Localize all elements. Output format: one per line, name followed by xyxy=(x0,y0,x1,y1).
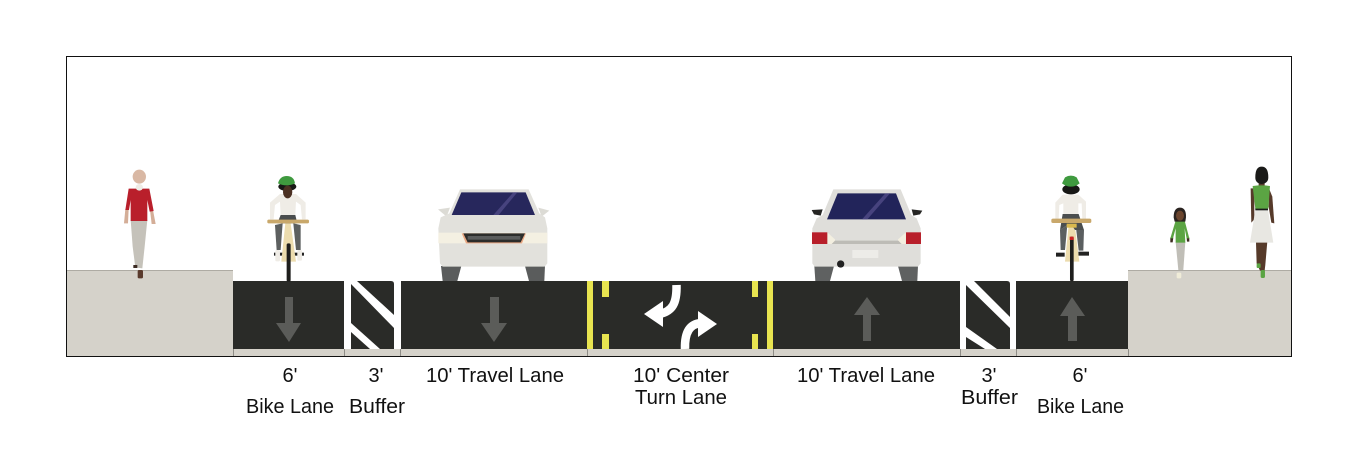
icon: up arrow xyxy=(1060,297,1085,341)
cyclist riding toward viewer xyxy=(267,176,309,282)
right bike lane xyxy=(1016,281,1128,349)
label: center turn lane: Turn Lane xyxy=(635,387,727,409)
label: center turn lane xyxy=(633,365,729,409)
label: left bike lane xyxy=(246,365,334,418)
pedestrian: child in green xyxy=(1170,208,1189,278)
label: right buffer: 3' xyxy=(982,365,996,387)
car front view xyxy=(438,189,549,281)
label: left bike lane: Bike Lane xyxy=(246,396,334,418)
left sidewalk xyxy=(67,270,233,356)
icon: down arrow xyxy=(276,297,301,342)
label: left bike lane: 6' xyxy=(283,365,297,387)
label: right travel lane: 10' Travel Lane xyxy=(797,365,935,387)
right travel lane xyxy=(773,281,960,349)
frame border xyxy=(66,56,1292,356)
right buffer xyxy=(966,281,1010,349)
label: center turn lane: 10' Center xyxy=(633,365,729,387)
icon: left turn arrow xyxy=(644,285,677,327)
left travel lane xyxy=(401,281,587,349)
pedestrian: man in red sweater xyxy=(124,170,156,278)
icon: down arrow xyxy=(481,297,507,342)
label: right buffer: Buffer xyxy=(961,387,1018,409)
icon: right turn arrow xyxy=(685,311,717,349)
label: right bike lane xyxy=(1037,365,1124,418)
car rear view xyxy=(812,189,922,281)
right sidewalk xyxy=(1128,270,1291,356)
roadway base strip xyxy=(233,349,1129,356)
label: right bike lane: Bike Lane xyxy=(1037,396,1124,418)
icon: up arrow xyxy=(854,297,880,341)
label: left travel lane: 10' Travel Lane xyxy=(426,365,564,387)
label: right bike lane: 6' xyxy=(1073,365,1087,387)
label: left buffer: Buffer xyxy=(349,396,405,418)
label: right buffer xyxy=(961,365,1018,409)
left bike lane xyxy=(233,281,344,349)
pedestrian: woman in green top and white skirt xyxy=(1250,167,1274,278)
center turn lane xyxy=(587,281,773,349)
label: left buffer: 3' xyxy=(369,365,383,387)
left buffer xyxy=(351,281,394,349)
label: left buffer xyxy=(349,365,405,418)
cyclist riding away from viewer xyxy=(1051,176,1091,281)
